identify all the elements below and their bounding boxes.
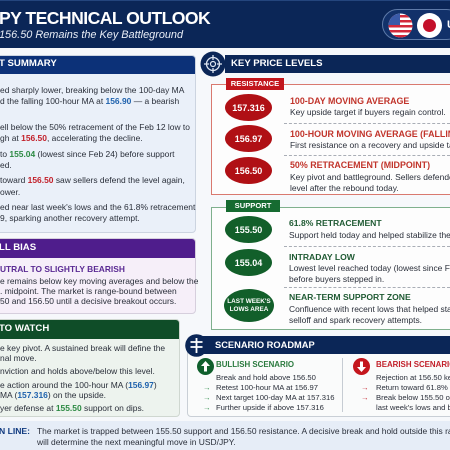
- summary header bar: [0, 56, 195, 74]
- bullish arrows: →: [203, 383, 211, 392]
- bullish list: Next target 100-day MA at 157.316: [216, 393, 335, 402]
- bullish heading: BULLISH SCENARIO: [216, 360, 294, 369]
- level: 155.50: 155.50: [235, 224, 262, 234]
- summary text: ed.: [0, 160, 12, 170]
- summary text: ed sharply lower, breaking below the 100-day MA: [0, 85, 184, 95]
- bearish list: [376, 372, 450, 412]
- bias header bar: [0, 239, 195, 258]
- subtitle: 156.50 Remains the Key Battleground: [0, 29, 183, 41]
- level text: intraday low: [289, 263, 450, 284]
- icon: Japan flag: [417, 13, 442, 38]
- summary text: gh at 156.50, accelerating the decline.: [0, 133, 143, 143]
- header banner: [0, 0, 450, 48]
- level: last week's lows: [224, 289, 274, 322]
- level: 155.04: 155.04: [235, 258, 262, 268]
- panel: what to watch: [0, 319, 180, 417]
- level: 155.04: [225, 249, 272, 276]
- level: 157.316: 157.316: [232, 102, 265, 112]
- summary heading: T SUMMARY: [0, 58, 57, 69]
- bias text: 50 and 156.50 until a decisive breakout occurs.: [0, 296, 176, 306]
- summary text: toward 156.50 saw sellers defend the level again,: [0, 175, 185, 185]
- level: 156.50: [225, 157, 272, 184]
- watch text: e action around the 100-hour MA (156.97): [0, 380, 157, 390]
- level: 157.316: [225, 94, 272, 121]
- watch text: [0, 343, 165, 413]
- level text: near-term support: [289, 304, 450, 324]
- icon: target: [200, 52, 225, 76]
- bottom line text: [37, 426, 450, 447]
- flags pill: [382, 9, 450, 40]
- icon: up arrow: [197, 358, 214, 375]
- level text: near-term support: selloff and spark recovery attempts.: [289, 314, 422, 324]
- level heading: 61.8%: 61.8% RETRACEMENT: [289, 218, 382, 228]
- icon: US flag: [388, 14, 412, 38]
- watch text: nviction and holds above/below this level.: [0, 366, 155, 376]
- bullish scenario: [197, 358, 335, 412]
- panel: overall bias: [0, 238, 196, 314]
- level: 156.97: [225, 125, 272, 152]
- panel: support: [211, 207, 450, 330]
- summary text: ower.: [0, 187, 20, 197]
- bullish list: Break and hold above 156.50: [216, 372, 316, 382]
- scenario heading: SCENARIO ROADMAP: [215, 340, 315, 350]
- bottom line bar: [0, 421, 450, 450]
- panel: scenario roadmap: [187, 336, 450, 417]
- bias text: . midpoint. The market is range-bound between: [0, 286, 177, 296]
- bullish list: Retest 100-hour MA at 156.97: [216, 383, 318, 392]
- level: last week's lows: LAST WEEK'S: [227, 298, 271, 304]
- panel: resistance: [211, 84, 450, 195]
- scenario header bar: [200, 336, 450, 354]
- support tag: [226, 200, 280, 212]
- level text: 50% retracement: [290, 172, 450, 192]
- bias text: UTRAL TO SLIGHTLY BEARISH: [0, 264, 125, 274]
- icon: scales: [185, 334, 204, 357]
- title: PY TECHNICAL OUTLOOK: [0, 8, 210, 28]
- bias text: [0, 264, 198, 306]
- bullish arrows: →: [203, 393, 211, 402]
- watch text: nal move.: [0, 353, 37, 363]
- level: last week's lows: LOWS AREA: [230, 306, 268, 312]
- bearish scenario: [353, 358, 450, 412]
- summary text: to 155.04 (lowest since Feb 24) before support: [0, 149, 174, 159]
- summary text: ed near last week's lows and the 61.8% retracement: [0, 202, 195, 212]
- watch heading: TO WATCH: [0, 323, 49, 334]
- bullish arrows: →: [203, 403, 211, 412]
- bottom line text: will determine the next meaningful move in USD/JPY.: [37, 437, 236, 447]
- level: 156.50: 156.50: [235, 166, 262, 176]
- level text: 100-day MA: Key upside target if buyers regain control.: [290, 107, 446, 117]
- level text: 50% retracement: level after the rebound today.: [290, 182, 399, 192]
- support tag: SUPPORT: [235, 201, 271, 210]
- panel: market summary: [0, 55, 196, 233]
- bearish arrows: →: [361, 383, 369, 392]
- bullish list: Further upside if above 157.316: [216, 403, 324, 412]
- watch text: e key pivot. A sustained break will define the: [0, 343, 165, 353]
- key price levels header: [225, 55, 450, 73]
- bearish arrows: [361, 383, 369, 402]
- level: 156.97: 156.97: [235, 134, 262, 144]
- level heading: near-term support: NEAR-TERM SUPPORT ZONE: [289, 292, 411, 302]
- summary text: ell below the 50% retracement of the Feb 12 low to: [0, 122, 190, 132]
- watch text: yer defense at 155.50 support on dips.: [0, 403, 144, 413]
- summary text: [0, 85, 196, 223]
- level heading: 100-day MA: 100-DAY MOVING AVERAGE: [290, 96, 409, 106]
- bullish arrows: [203, 383, 211, 412]
- bearish arrows: →: [361, 393, 369, 402]
- watch text: MA (157.316) on the upside.: [0, 390, 106, 400]
- level: 155.50: [225, 216, 272, 243]
- level heading: 50% retracement: 50% RETRACEMENT (MIDPOINT): [290, 160, 430, 170]
- level heading: intraday low: INTRADAY LOW: [289, 252, 355, 262]
- summary text: d the falling 100-hour MA at 156.90 — a bearish: [0, 96, 179, 106]
- level text: intraday low: before buyers stepped in.: [289, 274, 384, 284]
- resistance tag: RESISTANCE: [231, 79, 279, 88]
- watch header bar: [0, 320, 179, 339]
- summary text: 9, sparking another recovery attempt.: [0, 213, 140, 223]
- bias text: e remains below key moving averages and below the: [0, 276, 198, 286]
- bias heading: LL BIAS: [0, 242, 36, 253]
- key levels heading: KEY PRICE LEVELS: [231, 58, 323, 69]
- resistance tag: [226, 78, 284, 90]
- bullish list: [216, 372, 335, 412]
- icon: down arrow: [353, 358, 370, 375]
